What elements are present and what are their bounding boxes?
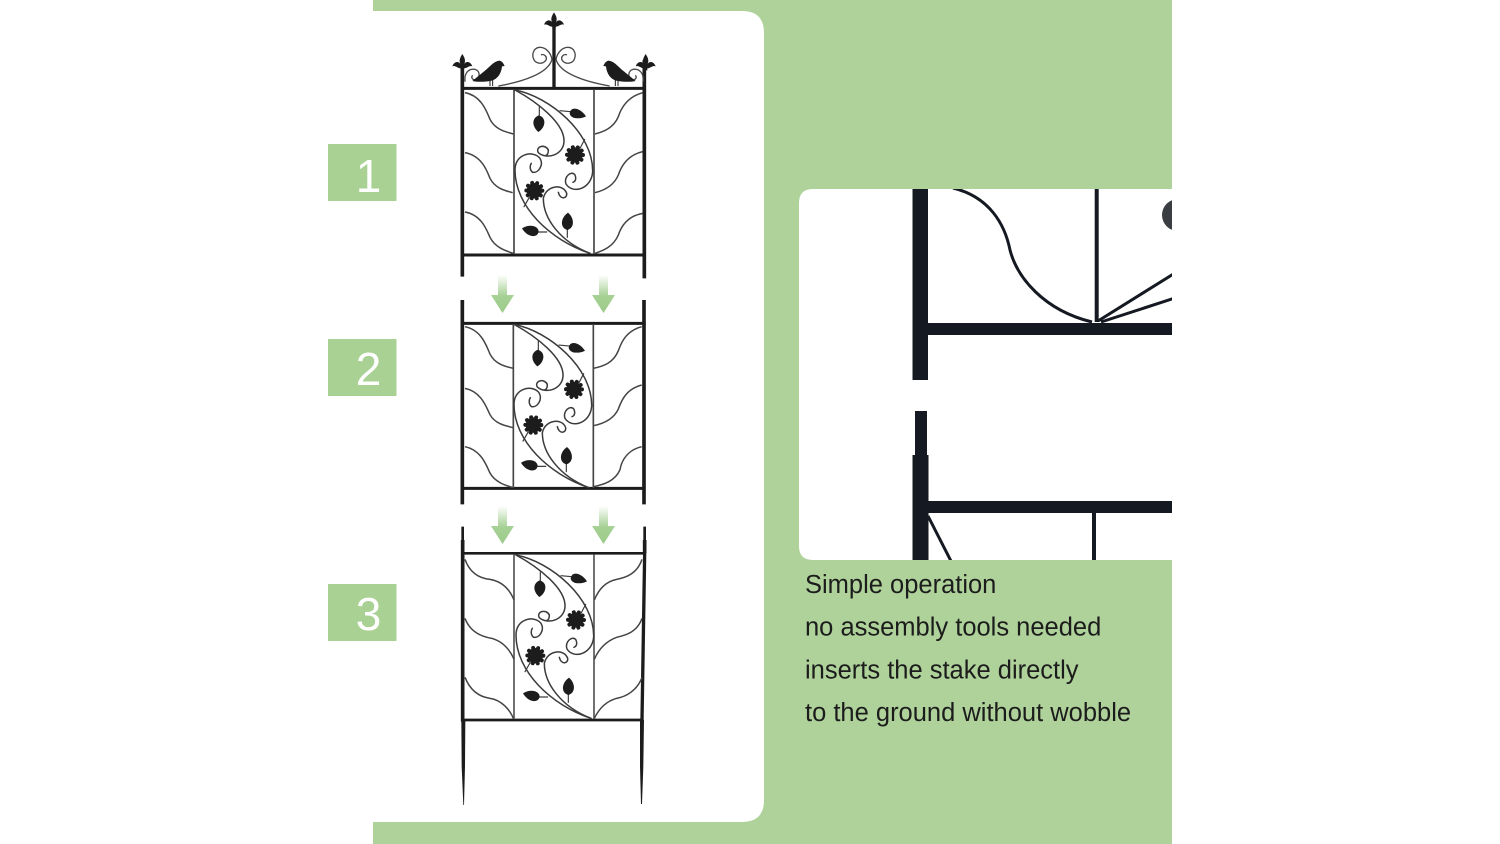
step badge 1 xyxy=(328,144,396,202)
step badge 3 xyxy=(328,584,396,641)
arrow: panel 1 to 2 right xyxy=(592,275,615,313)
step badge 1: 1 xyxy=(356,150,381,202)
white left panel xyxy=(373,11,764,822)
step badge 2 xyxy=(328,339,396,396)
green background panel xyxy=(373,0,1172,844)
step badge 2: 2 xyxy=(356,343,381,395)
trellis panel 1 with top ornament xyxy=(452,12,656,278)
close-up photo of stake joint xyxy=(912,185,1194,565)
trellis panel 2 xyxy=(461,300,646,504)
step badge 3: 3 xyxy=(356,588,381,640)
description text: Simple operation xyxy=(805,571,996,599)
arrow: panel 1 to 2 left xyxy=(491,275,514,313)
description text: inserts the stake directly xyxy=(805,656,1079,684)
description text: to the ground without wobble xyxy=(805,699,1131,727)
trellis panel 3 with ground stakes xyxy=(461,527,646,805)
description text xyxy=(805,571,1131,727)
description text: no assembly tools needed xyxy=(805,614,1101,642)
white detail panel xyxy=(799,189,1172,560)
arrow: panel 2 to 3 right xyxy=(592,506,615,544)
arrow: panel 2 to 3 left xyxy=(491,506,514,544)
